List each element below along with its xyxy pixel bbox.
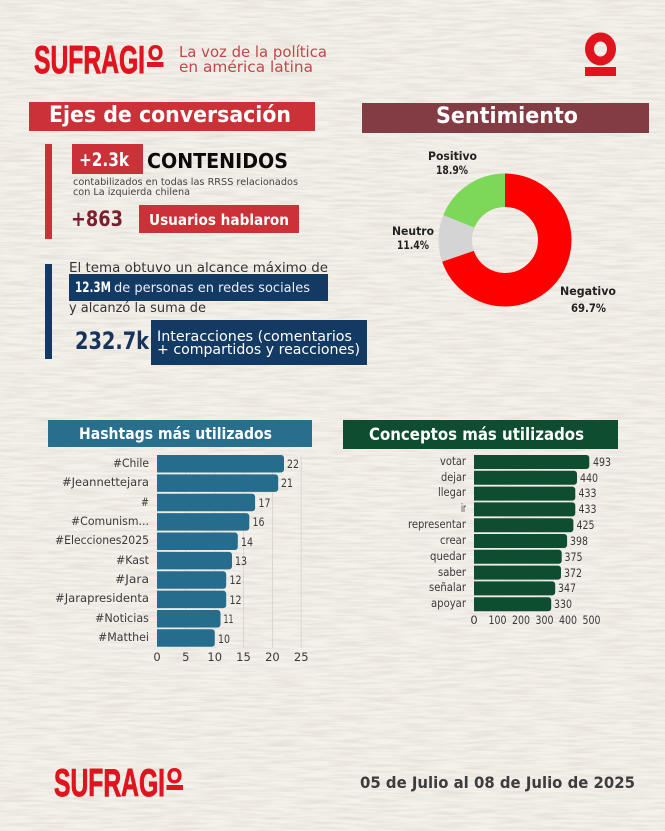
panel: alcance e interacciones [45, 260, 367, 365]
bar chart: hashtags: #Jarapresidenta [55, 591, 149, 605]
bar chart: hashtags: 12 [230, 573, 242, 587]
bar chart: conceptos: 433 [578, 486, 596, 500]
bar chart: hashtags: #Jara [115, 572, 149, 586]
text: contabilizados description [73, 177, 298, 198]
bar chart: conceptos: 400 [559, 613, 577, 627]
label: Neutro: Neutro [392, 224, 434, 238]
donut chart: sentimiento [392, 149, 616, 315]
bar chart: hashtags: # [141, 495, 149, 509]
stat: 12.3M personas: 12.3M [75, 280, 111, 296]
label: Positivo [428, 149, 477, 177]
heading: Ejes de conversación: Ejes de conversación [49, 103, 291, 128]
bar chart: conceptos: apoyar [431, 596, 466, 610]
stat: 12.3M personas [69, 274, 328, 301]
date range: 05 de Julio al 08 de Julio de 2025 [360, 773, 635, 792]
heading: Hashtags más utilizados [48, 420, 312, 447]
bar chart: conceptos: 500 [582, 613, 600, 627]
text: contabilizados description: contabilizados en todas las RRSS relacionados [73, 177, 298, 188]
label: Positivo: Positivo [428, 149, 477, 163]
bar chart: conceptos: 493 [593, 455, 611, 469]
bar chart: conceptos: 440 [580, 471, 598, 485]
bar chart: hashtags: 11 [224, 612, 234, 626]
bar chart: conceptos: 347 [558, 581, 576, 595]
bar chart: hashtags: #Jeannettejara [62, 475, 149, 489]
bar chart: hashtags: 17 [258, 496, 270, 510]
bar chart: hashtags: 22 [287, 457, 299, 471]
bar chart: conceptos: representar [408, 517, 466, 531]
stat: +863 usuarios [71, 205, 299, 233]
bar chart: hashtags: #Chile [113, 456, 149, 470]
callout: interacciones: + compartidos y reacciones) [157, 342, 360, 358]
label: Negativo: Negativo [560, 284, 616, 298]
bar chart: conceptos: 200 [512, 613, 530, 627]
tagline: La voz de la política [179, 43, 327, 61]
label: Neutro [392, 224, 434, 252]
stat: +2.3k contenidos: CONTENIDOS [147, 149, 288, 173]
heading: Conceptos más utilizados [343, 420, 618, 449]
bar chart: hashtags: #Comunism... [71, 514, 149, 528]
callout: interacciones [151, 320, 367, 365]
bar chart: conceptos: crear [440, 533, 466, 547]
bar chart: hashtags: 21 [281, 476, 293, 490]
bar chart: hashtags: 5 [182, 650, 189, 664]
bar chart: conceptos: 300 [536, 613, 554, 627]
bar chart: conceptos: quedar [430, 549, 466, 563]
stat: 12.3M personas: de personas en redes sociales [114, 280, 310, 296]
bar chart: hashtags: 25 [294, 650, 309, 664]
stat: 232.7k: 232.7k [75, 327, 150, 355]
bar chart: conceptos: dejar [441, 470, 466, 484]
bar chart: hashtags: 10 [218, 632, 230, 646]
label: Neutro: 11.4% [397, 238, 429, 252]
heading: Sentimiento [362, 103, 649, 133]
bar chart: hashtags: #Matthei [98, 630, 149, 644]
bar chart: hashtags: 13 [235, 554, 247, 568]
bar chart: hashtags: 10 [207, 650, 222, 664]
bar chart: hashtags: 14 [241, 535, 253, 549]
heading: Sentimiento: Sentimiento [436, 104, 578, 129]
bar chart: conceptos [408, 454, 611, 627]
tagline: en américa latina [179, 58, 313, 76]
bar chart: conceptos: 398 [570, 534, 588, 548]
bar chart: conceptos: 375 [564, 550, 582, 564]
bar chart: conceptos: 0 [470, 613, 478, 627]
label: Negativo: 69.7% [571, 301, 606, 315]
logo: Sufragio footer: O [167, 765, 182, 788]
panel: contenidos [45, 144, 299, 239]
label: Positivo: 18.9% [436, 163, 468, 177]
bar chart: hashtags: 0 [153, 650, 161, 664]
bar chart: hashtags: #Elecciones2025 [55, 533, 149, 547]
stat: +863 usuarios: +863 [71, 207, 123, 231]
label: Negativo [560, 284, 616, 315]
logo: Sufragio header: O [148, 42, 163, 65]
tagline [179, 43, 327, 76]
bar chart: hashtags: 12 [230, 593, 242, 607]
bar chart: conceptos: saber [438, 565, 466, 579]
bar chart: conceptos: 330 [554, 597, 572, 611]
logo: Sufragio footer: SUFRAGI [54, 762, 165, 805]
bar chart: hashtags: 15 [236, 650, 251, 664]
bar chart: conceptos: 425 [576, 518, 594, 532]
bar chart: hashtags: #Noticias [95, 611, 149, 625]
bar chart: conceptos: 433 [578, 502, 596, 516]
bar chart: conceptos: 100 [488, 613, 506, 627]
stat: +2.3k contenidos [72, 144, 288, 174]
bar chart: conceptos: ir [461, 501, 466, 515]
bar chart: conceptos: 372 [564, 566, 582, 580]
bar chart: hashtags: 16 [252, 515, 264, 529]
text: alcance intro: El tema obtuvo un alcance máximo de [69, 260, 328, 276]
bar chart: hashtags [55, 455, 309, 664]
bar chart: conceptos: llegar [438, 485, 466, 499]
icon: Sufragio O mark [585, 37, 616, 76]
heading: Hashtags más utilizados: Hashtags más utilizados [79, 424, 272, 443]
text: contabilizados description: con La izquierda chilena [73, 187, 190, 198]
bar chart: conceptos: votar [440, 454, 466, 468]
bar chart: hashtags: 20 [265, 650, 280, 664]
heading: Conceptos más utilizados: Conceptos más utilizados [369, 425, 584, 445]
stat: +2.3k contenidos: +2.3k [79, 149, 129, 171]
logo: Sufragio header: SUFRAGI [34, 39, 145, 82]
callout: interacciones: Interacciones (comentarios [157, 329, 352, 345]
stat: +863 usuarios: Usuarios hablaron [149, 211, 289, 229]
text: suma: y alcanzó la suma de [69, 300, 206, 316]
bar chart: hashtags: #Kast [116, 553, 149, 567]
bar chart: conceptos: señalar [429, 580, 466, 594]
